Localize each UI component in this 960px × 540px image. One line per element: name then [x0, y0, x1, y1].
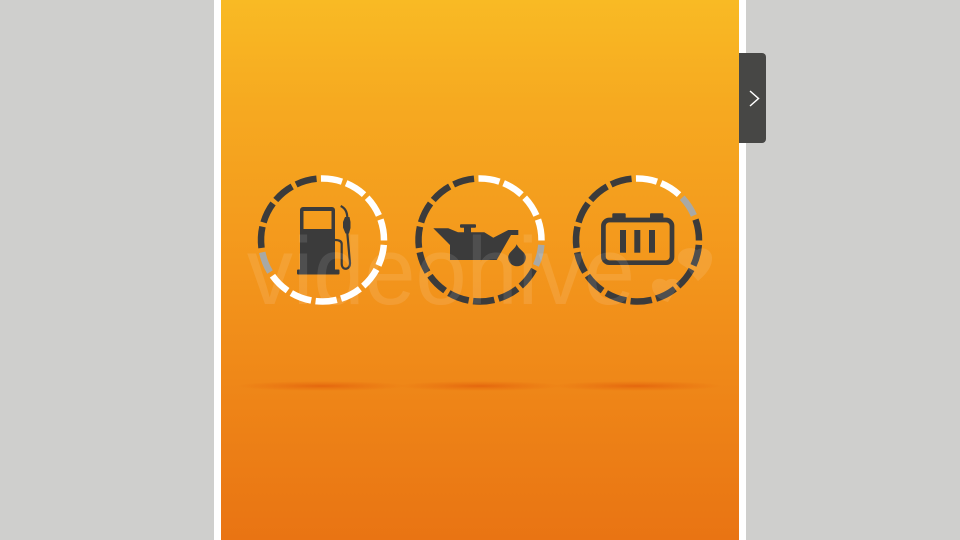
gauge ring: battery	[551, 153, 724, 327]
gauge ring: oil	[393, 153, 567, 327]
floor shadows	[237, 381, 722, 391]
icon: oil can with drop	[433, 224, 526, 266]
watermark: videohive	[247, 218, 635, 325]
side tab	[739, 53, 766, 143]
icon: fuel pump	[297, 206, 350, 274]
panel: white frame	[214, 0, 746, 540]
panel: orange gradient	[221, 0, 739, 540]
icon: battery	[603, 213, 672, 263]
gauge ring: fuel	[236, 153, 409, 327]
icon: chevron arrow	[750, 91, 758, 106]
